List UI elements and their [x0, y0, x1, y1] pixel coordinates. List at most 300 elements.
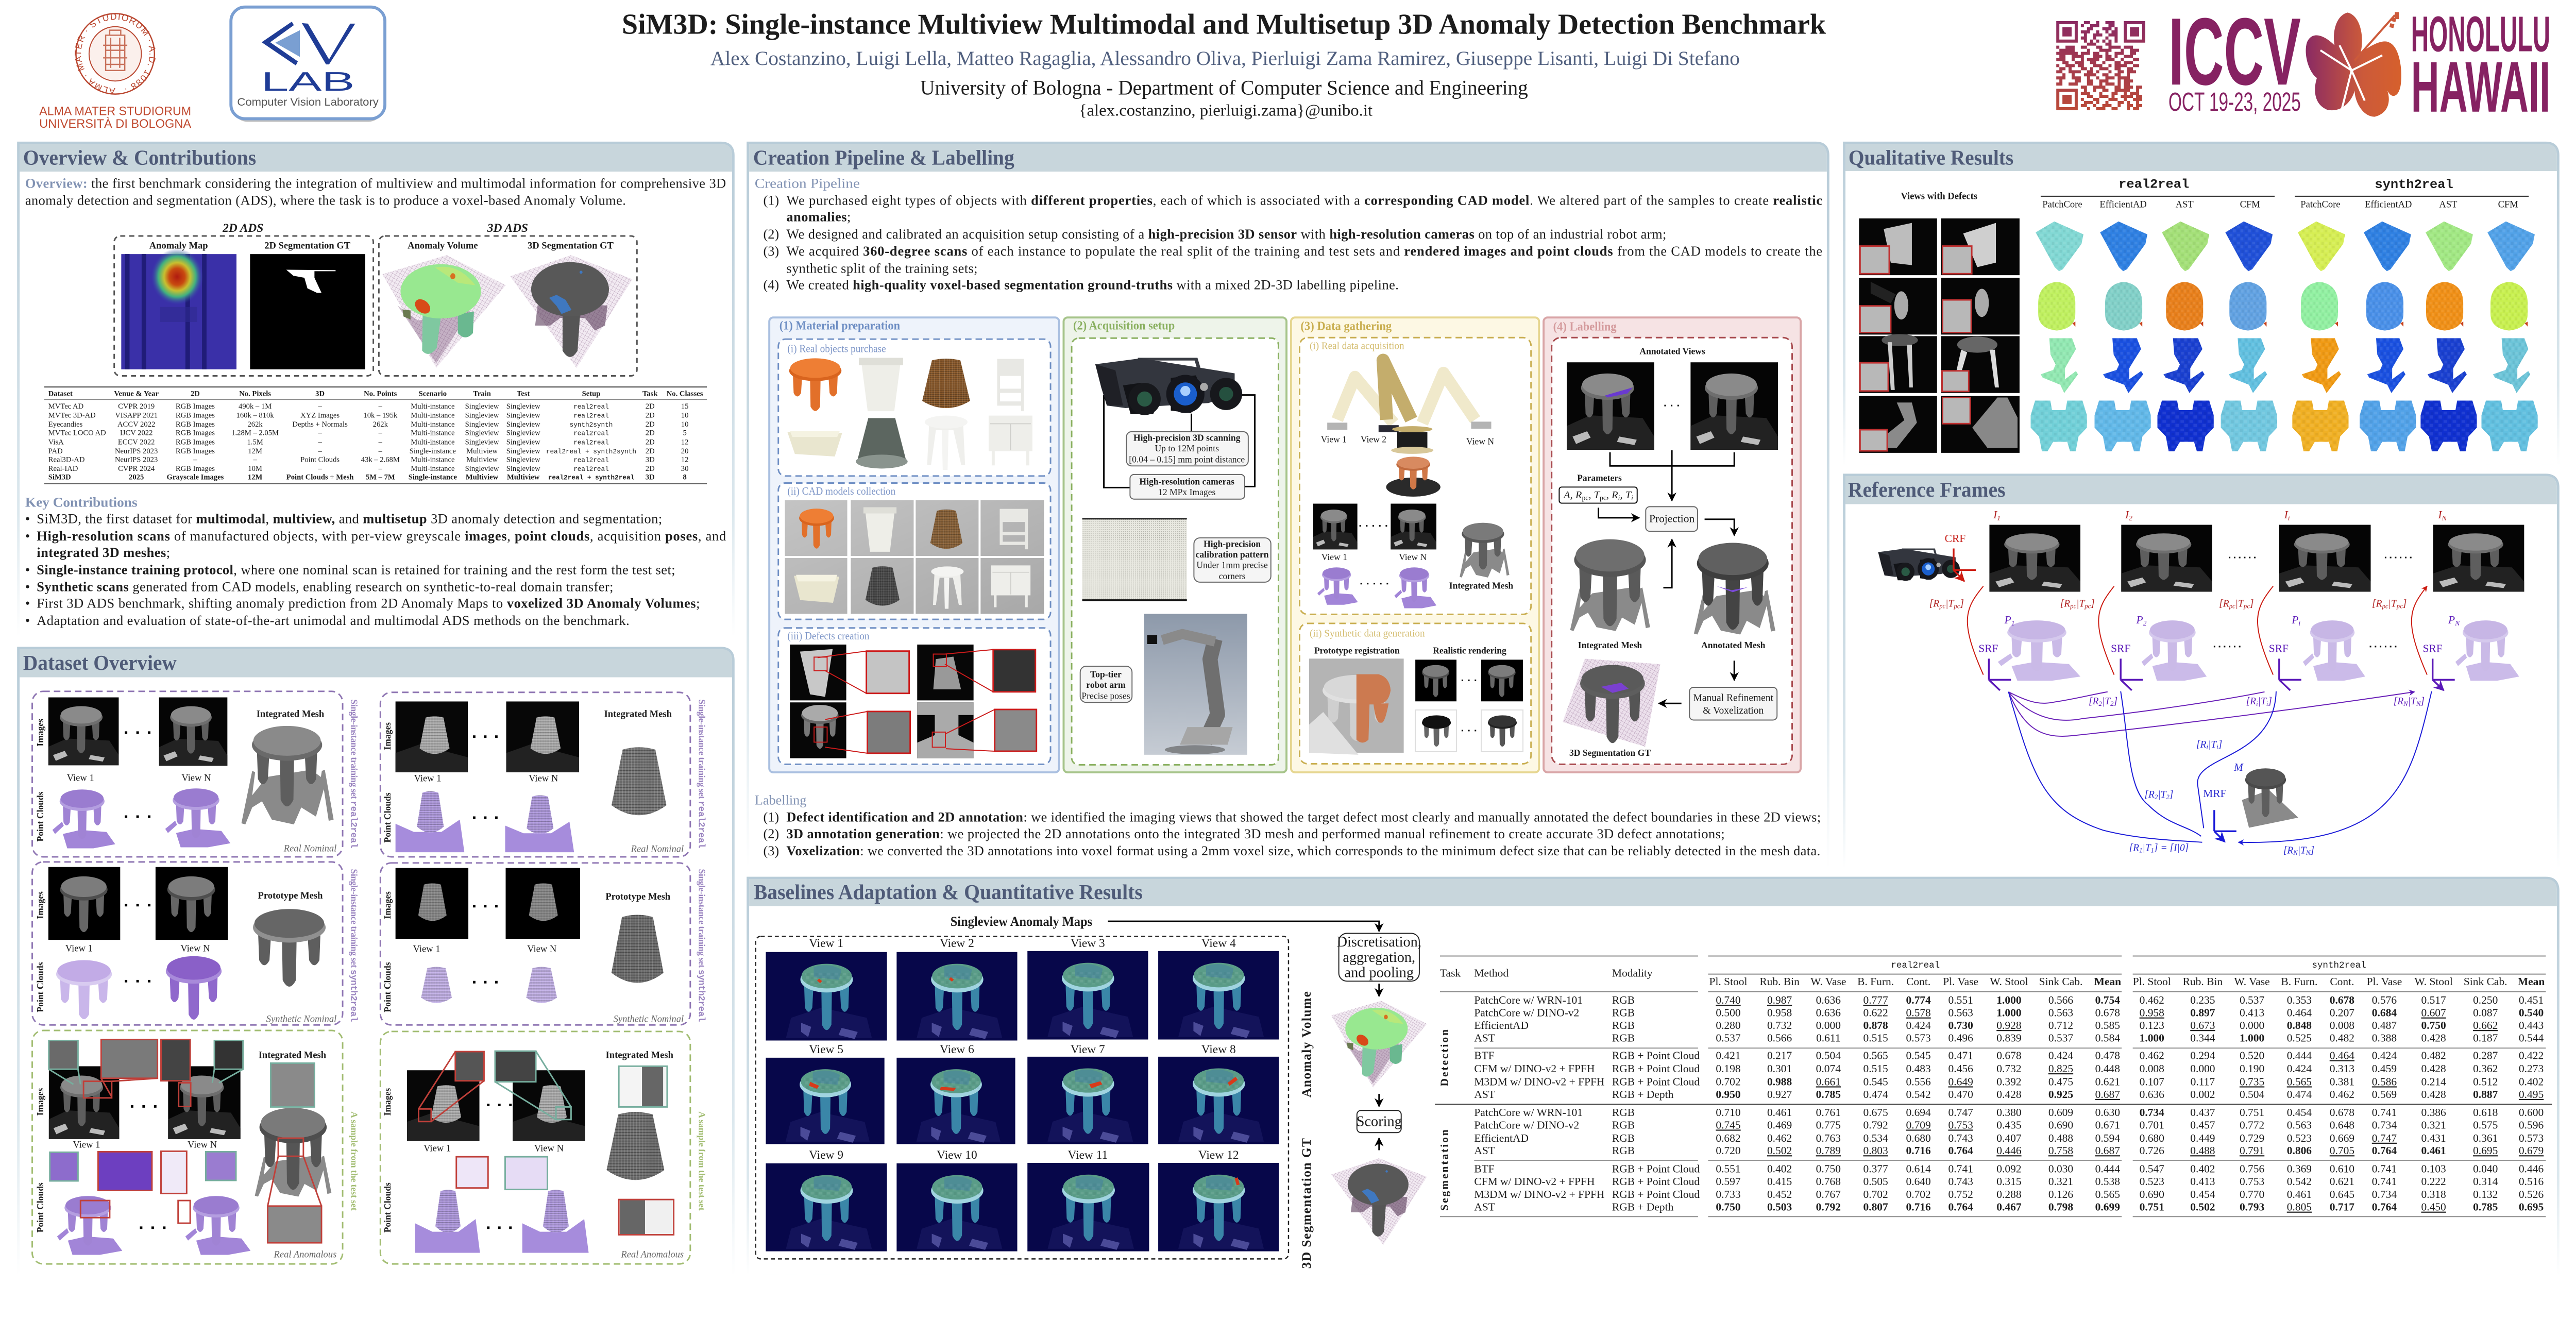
results table: 0.467: [1996, 1201, 2022, 1213]
results table: 0.775: [1816, 1119, 1841, 1131]
singleview maps: View 12: [1198, 1148, 1239, 1162]
dataset comparison table: Singleview: [465, 420, 499, 429]
results table: 0.461: [2287, 1188, 2312, 1200]
key contributions list: High-resolution scans of manufactured objects, with per-view greyscale images, point clouds, acquisition poses, and: [37, 529, 726, 544]
dataset comparison table: Multi-instance: [411, 455, 454, 464]
segmentation mask image: [250, 254, 365, 369]
callout: robot arm: Top-tier: [1090, 669, 1122, 679]
projection box: Projection: [1649, 513, 1695, 525]
singleview maps: View 5: [809, 1043, 843, 1056]
results table: 0.402: [2190, 1162, 2215, 1175]
results table: synth2real: [2312, 960, 2366, 971]
dataset comparison table: real2real + synth2real: [548, 474, 635, 482]
sub-panel: (4) Labelling: (4) Labelling: [1553, 320, 1617, 334]
results table: W. Stool: [1990, 975, 2028, 988]
results table: RGB + Point Cloud: [1612, 1162, 1700, 1175]
results table: 0.669: [2330, 1132, 2354, 1144]
dataset comparison table: ECCV 2022: [118, 438, 155, 446]
blue pose arrows: N: [2293, 849, 2298, 856]
column headers: PatchCore: [2300, 199, 2341, 210]
red projection arrows: ]: [2402, 599, 2406, 610]
sample box: real anomalous stool: Real Anomalous: [274, 1249, 336, 1260]
results table: 0.678: [2330, 994, 2354, 1006]
dataset comparison table: Multi-instance: [411, 429, 454, 437]
defect views: [1859, 218, 2020, 453]
results table: 0.526: [2519, 1188, 2544, 1200]
results table: 0.770: [2240, 1188, 2264, 1200]
results table: 0.777: [1863, 994, 1888, 1006]
dataset comparison table: CVPR 2019: [118, 402, 155, 411]
dataset comparison table: 2D: [646, 420, 655, 429]
results table: 0.764: [1948, 1144, 1973, 1157]
column headers: AST: [2439, 199, 2458, 210]
results table: 0.785: [2473, 1201, 2498, 1213]
dataset comparison table: –: [378, 465, 383, 473]
parameters box: [1559, 473, 1637, 503]
results table: 0.280: [1716, 1019, 1741, 1031]
figure: 2D ADS: Anomaly Map: [149, 240, 208, 251]
results table: RGB + Point Cloud: [1612, 1050, 1700, 1062]
purple pose arrows: [R: [2246, 696, 2256, 707]
aggregation box: and pooling: [1345, 965, 1414, 980]
annotated mesh: [1694, 543, 1775, 650]
results table: M3DM w/ DINO-v2 + FPFH: [1474, 1188, 1604, 1200]
results table: 0.294: [2190, 1050, 2215, 1062]
results table: RGB + Point Cloud: [1612, 1175, 1700, 1188]
image views: I: [2284, 509, 2288, 521]
results table: 0.747: [2372, 1132, 2397, 1144]
red projection arrows: [1929, 586, 2427, 675]
results table: 0.600: [2519, 1106, 2544, 1119]
refinement box: & Voxelization: [1703, 705, 1764, 716]
refinement box: Manual Refinement: [1693, 692, 1774, 703]
results table: 0.682: [1716, 1132, 1741, 1144]
dataset comparison table: Singleview: [465, 429, 499, 437]
dataset comparison table: Singleview: [506, 465, 540, 473]
dataset comparison table: RGB Images: [176, 447, 215, 455]
results table: Modality: [1612, 967, 1653, 979]
results table: 0.537: [2240, 994, 2265, 1006]
results table: 0.407: [1996, 1132, 2022, 1144]
results table: 0.318: [2421, 1188, 2446, 1200]
sample box: real nominal basket: View N: [529, 773, 558, 784]
mesh with MRF axes: MRF: [2203, 787, 2227, 800]
labelling list: (1): [763, 810, 779, 825]
sample box: real anomalous stool: Integrated Mesh: [259, 1050, 327, 1061]
results table: 0.764: [2372, 1201, 2397, 1213]
results table: 0.758: [2048, 1144, 2073, 1157]
results table: 0.190: [2240, 1062, 2264, 1075]
panel header bar: [1845, 476, 2557, 504]
dataset comparison table: 2D: [191, 390, 200, 398]
red projection arrows: pc: [2243, 603, 2250, 610]
results table: 0.424: [1906, 1019, 1931, 1031]
results table: 0.614: [1906, 1162, 1931, 1175]
key contributions list: Synthetic scans generated from CAD models, enabling research on synthetic-to-real domain transfer;: [37, 579, 613, 594]
point clouds with SRF axes: 1: [2011, 619, 2015, 627]
dataset comparison table: 10: [681, 420, 688, 429]
sample box: real nominal stool: View 1: [67, 773, 94, 784]
results table: 0.785: [1816, 1088, 1841, 1101]
real data acquisition: Integrated Mesh: [1449, 581, 1513, 591]
results table: 0.743: [1948, 1175, 1973, 1188]
results table: 0.495: [2519, 1088, 2544, 1101]
results table: 0.640: [1906, 1175, 1931, 1188]
point clouds with SRF axes: P: [2448, 614, 2455, 626]
sample box: synthetic nominal stool: [32, 862, 343, 1025]
sample box: synthetic nominal stool: Synthetic Nominal: [266, 1013, 336, 1024]
results table: Task: [1440, 967, 1461, 979]
purple pose arrows: i: [2256, 700, 2258, 707]
results table: 0.772: [2240, 1119, 2264, 1131]
results table: 0.437: [2190, 1106, 2215, 1119]
dataset comparison table: –: [317, 429, 322, 437]
robot arm render: [1144, 614, 1247, 755]
results table: 0.958: [1767, 1007, 1792, 1019]
dataset comparison table: 2D: [646, 412, 655, 420]
dataset comparison table: 30: [681, 465, 688, 473]
dataset comparison table: 5M – 7M: [366, 474, 395, 482]
key contributions list: •: [25, 562, 30, 577]
results table: 0.525: [2287, 1031, 2312, 1044]
results table: 0.621: [2330, 1175, 2354, 1188]
red projection arrows: pc: [2396, 603, 2403, 610]
results table: 0.607: [2421, 1007, 2446, 1019]
results table: 0.502: [2190, 1201, 2215, 1213]
red projection arrows: pc: [1939, 603, 1946, 610]
results table: 0.214: [2421, 1075, 2446, 1088]
3D segmentation GT voxels: 3D Segmentation GT: [1569, 748, 1651, 758]
figure: 2D ADS: 2D Segmentation GT: [264, 240, 351, 251]
sample box: real nominal stool: Real Nominal: [283, 843, 336, 854]
sample box: real anomalous stool: View N: [188, 1140, 217, 1151]
point clouds with SRF axes: SRF: [2269, 642, 2289, 655]
results table: 0.537: [1716, 1031, 1741, 1044]
results table: 0.402: [1767, 1162, 1792, 1175]
dataset comparison table: RGB Images: [176, 438, 215, 446]
sub-panel: (2) Acquisition setup: (2) Acquisition setup: [1073, 319, 1175, 333]
scanner with CRF axes: [1878, 532, 1976, 581]
results table: 0.448: [2095, 1062, 2120, 1075]
dataset comparison table: –: [378, 438, 383, 446]
red projection arrows: [R: [2060, 599, 2070, 610]
sample box: real nominal basket: Images: [382, 722, 393, 750]
results table: 0.747: [1948, 1106, 1973, 1119]
results table: RGB + Depth: [1612, 1088, 1674, 1101]
blue pose arrows: i: [2216, 743, 2218, 751]
blue pose arrows: [R: [2129, 842, 2139, 853]
results table: RGB: [1612, 1106, 1635, 1119]
sample box: real anomalous stool: Point Clouds: [35, 1182, 45, 1232]
results table: CFM w/ DINO-v2 + FPFH: [1474, 1175, 1595, 1188]
results table: 0.761: [1816, 1106, 1841, 1119]
results table: 0.573: [1906, 1031, 1931, 1044]
results table: 0.123: [2140, 1019, 2164, 1031]
results table: 0.126: [2048, 1188, 2073, 1200]
dataset comparison table: 2D: [646, 438, 655, 446]
results table: M3DM w/ DINO-v2 + FPFH: [1474, 1075, 1604, 1088]
purple pose arrows: ]: [2267, 696, 2272, 707]
results table: 0.502: [1767, 1144, 1792, 1157]
results table: 0.454: [2287, 1106, 2312, 1119]
results table: 0.462: [1767, 1132, 1792, 1144]
title: SiM3D: Single-instance Multiview Multimodal and Multisetup 3D Anomaly Detection Benchmark: [622, 8, 1826, 40]
results table: 0.551: [1716, 1162, 1741, 1175]
results table: 0.805: [2287, 1201, 2312, 1213]
results table: 0.798: [2048, 1201, 2073, 1213]
results table: real2real: [1891, 960, 1940, 971]
sample box: real nominal basket: Integrated Mesh: [604, 709, 672, 720]
results table: 0.741: [2372, 1162, 2397, 1175]
results table: 0.958: [2140, 1007, 2164, 1019]
results table: 0.464: [2330, 1050, 2354, 1062]
dataset comparison table: No. Classes: [667, 390, 703, 398]
point clouds with SRF axes: i: [2298, 619, 2300, 627]
red projection arrows: pc: [1953, 603, 1960, 610]
results table: 0.763: [1816, 1132, 1841, 1144]
results table: 1.000: [1996, 1007, 2022, 1019]
image views: I: [1993, 509, 1997, 521]
results table: 0.456: [1948, 1062, 1973, 1075]
logo: University of Bologna: UNIVERSITÀ DI BOLOGNA: [39, 117, 192, 131]
results table: 0.679: [2519, 1144, 2544, 1157]
results table: 0.461: [1767, 1106, 1792, 1119]
results table: B. Furn.: [2281, 975, 2317, 988]
results table: W. Vase: [1810, 975, 1846, 988]
creation pipeline list: We created high-quality voxel-based segmentation ground-truths with a mixed 2D-3D labelling pipeline.: [786, 278, 1399, 293]
logo: ICCV Honolulu Hawaii: ICCV: [2168, 0, 2301, 105]
singleview maps: View 3: [1071, 937, 1105, 950]
results table: 0.726: [2140, 1144, 2164, 1157]
red projection arrows: |T: [1945, 599, 1955, 610]
dataset comparison table: 2D: [646, 447, 655, 455]
panel header bar: [20, 144, 732, 172]
results table: 0.717: [2330, 1201, 2354, 1213]
results table: RGB: [1612, 1007, 1635, 1019]
blue pose arrows: N: [2306, 849, 2311, 856]
results table: 0.250: [2473, 994, 2498, 1006]
real data acquisition: View 2: [1361, 434, 1386, 444]
sample box: synthetic nominal basket: Prototype Mesh: [605, 891, 671, 902]
dataset comparison table: XYZ Images: [300, 412, 340, 420]
results table: 0.000: [1816, 1019, 1841, 1031]
results table: 0.538: [2095, 1175, 2120, 1188]
column headers: synth2real: [2375, 177, 2453, 192]
column headers: EfficientAD: [2099, 199, 2147, 210]
email: {alex.costanzino, pierluigi.zama}@unibo.it: [1079, 102, 1372, 120]
results table: Detection: [1438, 1028, 1451, 1086]
results table: 0.273: [2519, 1062, 2544, 1075]
results table: 0.556: [1906, 1075, 1931, 1088]
authors: Alex Costanzino, Luigi Lella, Matteo Ragaglia, Alessandro Oliva, Pierluigi Zama Ramirez, Giuseppe Lisanti, Luigi Di Stefano: [710, 47, 1740, 70]
results table: 0.702: [1716, 1075, 1741, 1088]
results table: Segmentation: [1438, 1128, 1451, 1211]
callout: robot arm: robot arm: [1086, 680, 1126, 690]
heatmaps row 3: stool: [2041, 338, 2530, 393]
side label: test set, right column: A sample from the test set: [697, 1111, 707, 1211]
results table: 0.380: [1996, 1106, 2022, 1119]
3D segmentation GT voxels: [1563, 658, 1660, 758]
results table: 0.475: [2048, 1075, 2073, 1088]
results table: 0.402: [2519, 1075, 2544, 1088]
sample box: real anomalous stool: Images: [35, 1088, 45, 1116]
purple pose arrows: 2: [2110, 700, 2114, 707]
dataset comparison table: Multiview: [466, 455, 498, 464]
dataset comparison table: RGB Images: [176, 402, 215, 411]
results table: 0.792: [1816, 1201, 1841, 1213]
results table: 0.377: [1863, 1162, 1888, 1175]
dataset comparison table: Dataset: [48, 390, 73, 398]
projection box: [1646, 506, 1698, 531]
dataset comparison table: Task: [642, 390, 658, 398]
defects creation: [778, 628, 1050, 764]
heatmaps row 1: bin: [2036, 222, 2535, 271]
logo: University of Bologna: ALMA · MATER · STUDIORUM · A.D. 1088 ·: [75, 14, 156, 94]
defects creation: (iii) Defects creation: [787, 630, 870, 642]
results table: 0.353: [2287, 994, 2312, 1006]
parameters box: , T: [1620, 489, 1632, 501]
results table: 0.451: [2519, 994, 2544, 1006]
purple pose arrows: i: [2266, 700, 2268, 707]
panel: Overview and Contributions: [19, 143, 733, 636]
results table: 0.610: [2330, 1162, 2354, 1175]
dataset comparison table: Multiview: [466, 447, 498, 455]
sample box: real anomalous basket: View 1: [423, 1143, 451, 1154]
affiliation: University of Bologna - Department of Computer Science and Engineering: [920, 76, 1528, 99]
results table: 0.584: [2095, 1031, 2120, 1044]
point clouds with SRF axes: SRF: [1978, 642, 1998, 655]
results table: AST: [1474, 1031, 1495, 1044]
results table: 0.743: [1948, 1132, 1973, 1144]
callout: cameras: High-resolution cameras: [1139, 476, 1234, 486]
blue pose arrows: ]: [2310, 845, 2314, 856]
results table: 0.449: [2190, 1132, 2215, 1144]
heading: Reference Frames: [1848, 478, 2006, 501]
callout: 3D scanning: [1127, 432, 1248, 466]
dataset comparison table: [44, 387, 707, 483]
results table: 0.515: [1863, 1062, 1888, 1075]
results table: 0.222: [2421, 1175, 2446, 1188]
dataset comparison table: Multi-instance: [411, 420, 454, 429]
real data acquisition: View 1: [1321, 434, 1347, 444]
red projection arrows: [R: [2372, 599, 2382, 610]
dataset comparison table: –: [317, 402, 322, 411]
dataset comparison table: 12: [681, 438, 688, 446]
CAD models collection: (ii) CAD models collection: [787, 485, 896, 497]
red projection arrows: |T: [2235, 599, 2244, 610]
results table: 0.741: [2372, 1175, 2397, 1188]
purple pose arrows: |T: [2102, 696, 2111, 707]
dataset comparison table: –: [317, 438, 322, 446]
callout: calibration pattern: [1194, 538, 1271, 582]
dataset comparison table: 10k – 195k: [363, 412, 398, 420]
sub-panel: (2) Acquisition setup: [1063, 317, 1286, 772]
results table: 0.469: [1767, 1119, 1792, 1131]
sample box: real anomalous stool: [32, 1030, 343, 1264]
sample box: synthetic nominal stool: View N: [180, 943, 210, 954]
results table: 0.988: [1767, 1075, 1792, 1088]
dataset comparison table: Single-instance: [410, 447, 456, 455]
results table: 0.547: [2140, 1162, 2164, 1175]
results table: 0.002: [2190, 1088, 2215, 1101]
results table: 0.566: [2048, 994, 2073, 1006]
results table: 0.734: [2140, 1106, 2164, 1119]
dataset comparison table: No. Points: [364, 390, 397, 398]
results table: 0.596: [2519, 1119, 2544, 1131]
results table: 1.000: [2240, 1031, 2264, 1044]
results table: 0.753: [1948, 1119, 1973, 1131]
results table: 0.516: [2519, 1175, 2544, 1188]
results table: 0.735: [2240, 1075, 2264, 1088]
anomaly map image: [121, 248, 236, 369]
sample box: synthetic nominal basket: View N: [527, 944, 556, 955]
sub-panel: (1) Material preparation: [769, 317, 1059, 772]
dataset comparison table: Multiview: [507, 474, 540, 482]
results table: Sink Cab.: [2464, 975, 2507, 988]
column headers: Views with Defects: [1901, 191, 1977, 202]
sample box: real anomalous basket: [380, 1031, 690, 1264]
dataset comparison table: real2real: [573, 465, 609, 473]
results table: 0.793: [2240, 1201, 2264, 1213]
column headers: [1901, 177, 2529, 210]
results table: 0.716: [1906, 1201, 1931, 1213]
parameters box: , T: [1588, 489, 1601, 501]
real data acquisition: [1299, 337, 1531, 614]
synthetic data generation: Prototype registration: [1314, 646, 1400, 656]
creation pipeline list: (4): [763, 278, 779, 293]
blue pose arrows: [2008, 691, 2432, 856]
dataset comparison table: 1.5M: [247, 438, 263, 446]
dataset comparison table: Train: [473, 390, 491, 398]
results table: 0.288: [1996, 1188, 2022, 1200]
aggregation box: aggregation,: [1343, 950, 1415, 966]
red projection arrows: |T: [2388, 599, 2397, 610]
logo: University of Bologna: [39, 13, 192, 131]
red projection arrows: pc: [2229, 603, 2235, 610]
parameters box: pc: [1582, 494, 1588, 502]
heatmaps row 2: basket: [2038, 282, 2529, 331]
heading: Baselines Adaptation & Quantitative Results: [754, 880, 1143, 904]
dataset comparison table: SiM3D: [48, 474, 71, 482]
red projection arrows: [R: [1929, 599, 1939, 610]
results table: RGB: [1612, 1119, 1635, 1131]
results table: 0.540: [2519, 1007, 2544, 1019]
flow: aggregation and scoring: 3D Segmentation GT: [1299, 1138, 1314, 1269]
results table: 0.424: [2372, 1050, 2397, 1062]
creation pipeline list: (2): [763, 227, 779, 242]
QR code: [2056, 21, 2145, 110]
results table: 0.575: [2473, 1119, 2498, 1131]
results table: 0.636: [1816, 1007, 1841, 1019]
mesh with MRF axes: [2203, 761, 2298, 842]
dataset comparison table: NeurIPS 2023: [115, 447, 158, 455]
icon: hibiscus flower: [2306, 12, 2401, 117]
dataset comparison table: 5: [683, 429, 687, 437]
sample box: real nominal stool: Integrated Mesh: [257, 709, 325, 720]
results table: 0.422: [2519, 1050, 2544, 1062]
results table: 0.435: [1996, 1119, 2022, 1131]
dataset comparison table: –: [317, 465, 322, 473]
results table: 0.117: [2191, 1075, 2215, 1088]
dataset comparison table: 3D: [646, 455, 655, 464]
purple pose arrows: ]: [2113, 696, 2117, 707]
results table: 0.474: [2287, 1088, 2312, 1101]
results table: 0.586: [2372, 1075, 2397, 1088]
results table: 0.461: [2421, 1144, 2446, 1157]
results table: 0.618: [2473, 1106, 2498, 1119]
results table: PatchCore w/ WRN-101: [1474, 994, 1583, 1006]
results table: 0.563: [2048, 1007, 2073, 1019]
